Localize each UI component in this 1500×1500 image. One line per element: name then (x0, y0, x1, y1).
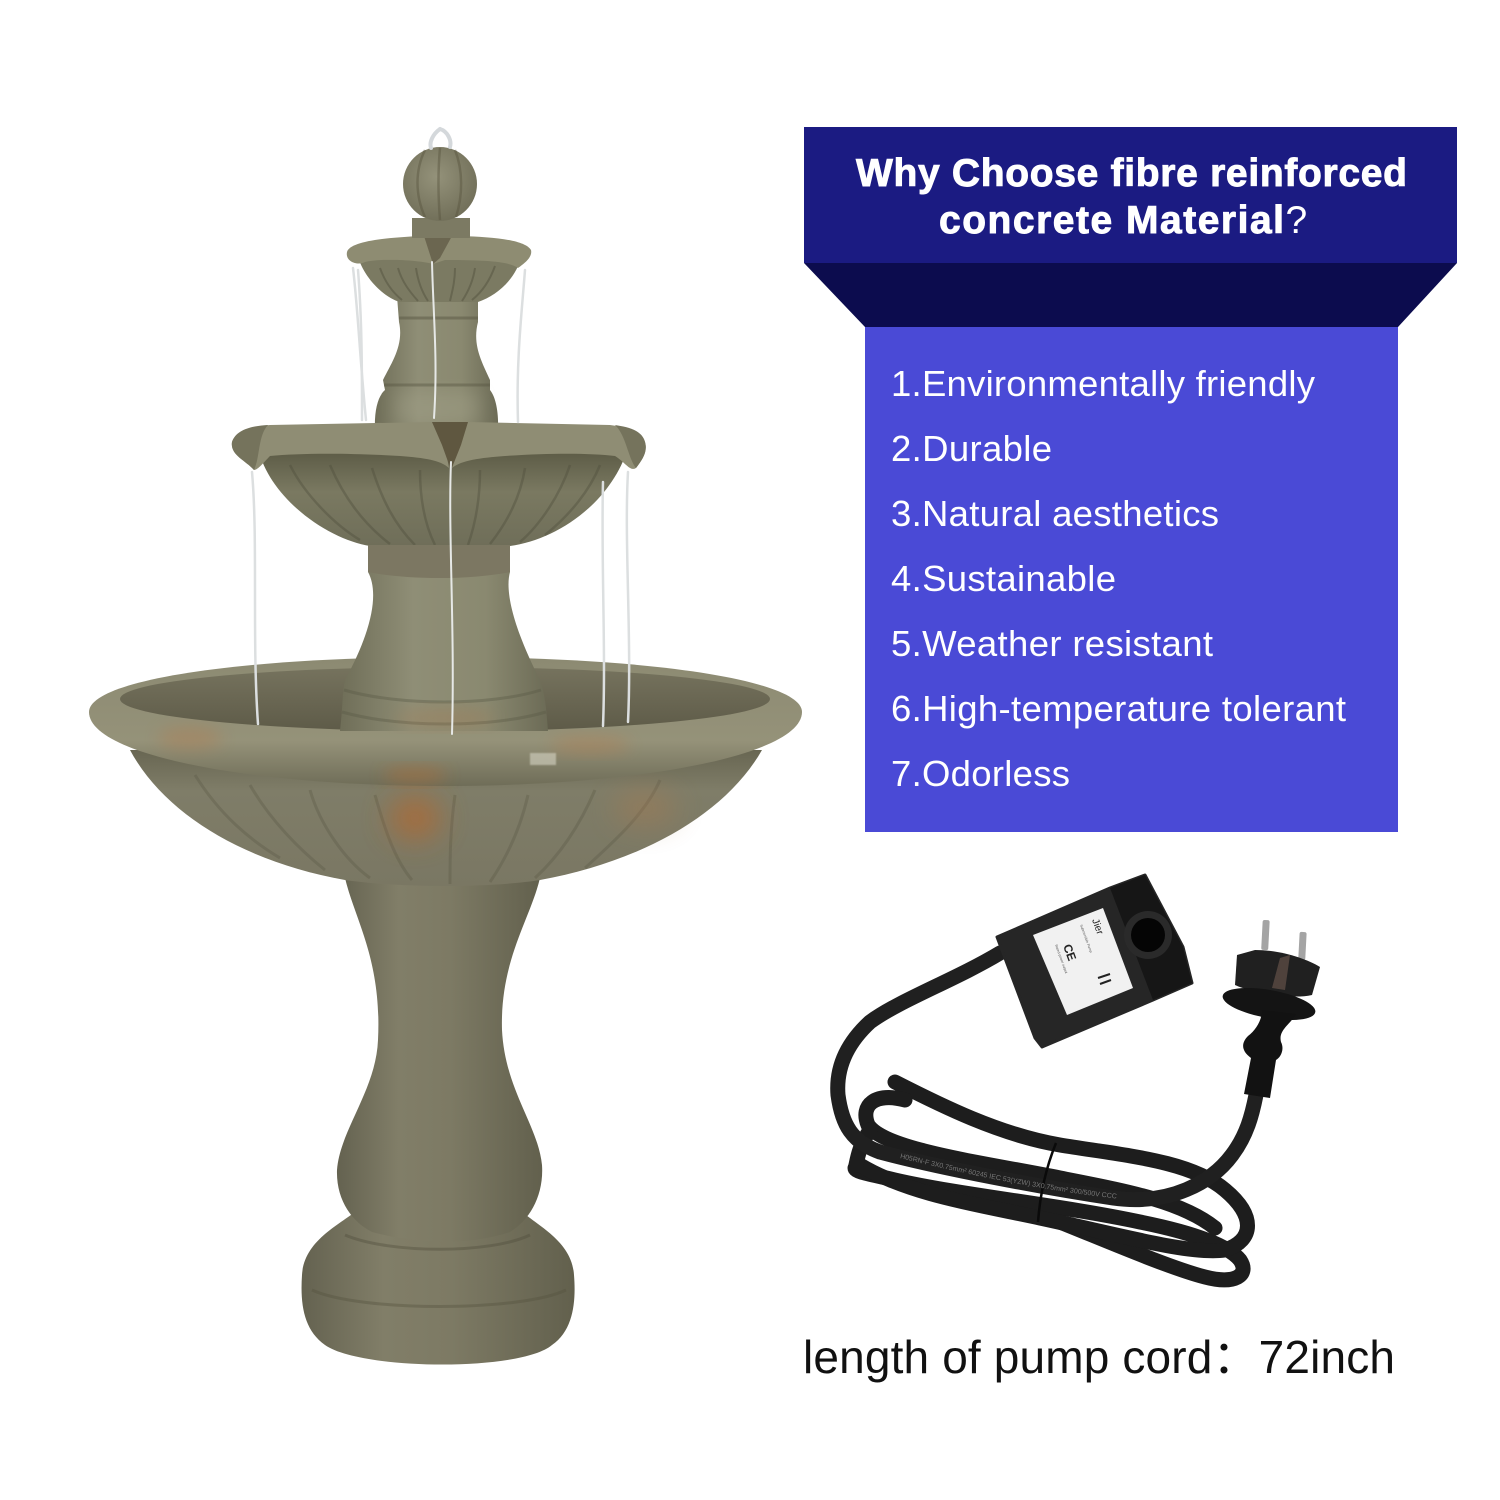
pump label: CE (1060, 942, 1079, 963)
cord marking: H05RN-F 3X0.75mm² 60245 IEC 53(YZW) 3X0.75mm² 300/500V CCC (900, 1154, 1116, 1198)
benefits text: 7.Odorless (891, 753, 1070, 794)
middle rim with spouts (232, 422, 646, 470)
upper rim with spouts (347, 236, 531, 268)
pump label: Jier (1089, 917, 1105, 937)
benefits text (891, 363, 1346, 794)
benefits text: 5.Weather resistant (891, 623, 1213, 664)
heading: concrete Material (939, 199, 1284, 242)
cord coils (838, 953, 1256, 1280)
main cord (838, 953, 1256, 1200)
benefits text: 3.Natural aesthetics (891, 493, 1219, 534)
fountain pedestal (337, 878, 542, 1242)
fountain (89, 129, 802, 1365)
panel: benefits list (865, 327, 1398, 832)
benefits text: 4.Sustainable (891, 558, 1116, 599)
benefits text: 1.Environmentally friendly (891, 363, 1316, 404)
pump label: Submersible Pump (1079, 924, 1093, 953)
lower rim (89, 657, 802, 786)
pump label (1033, 908, 1133, 1015)
cable tie (1038, 1143, 1056, 1222)
heading: ? (1286, 199, 1307, 242)
middle pedestal collar (368, 545, 510, 578)
fountain foot (302, 1208, 575, 1365)
heading: Why Choose fibre reinforced (856, 152, 1407, 195)
panel: why choose header (804, 127, 1457, 327)
pump body (997, 875, 1192, 1047)
lower basin interior (120, 667, 770, 731)
top ball finial (403, 147, 477, 238)
middle pedestal (340, 547, 548, 731)
lower bowl (130, 750, 762, 886)
header bar (804, 127, 1457, 263)
pump label: Rated power output (1054, 944, 1068, 974)
header shadow fold (804, 263, 1457, 327)
upper pedestal (375, 296, 498, 432)
water streams (252, 129, 629, 734)
benefits text: 6.High-temperature tolerant (891, 688, 1346, 729)
upper bowl (356, 250, 523, 302)
middle bowl (258, 448, 628, 578)
benefits text: 2.Durable (891, 428, 1052, 469)
pump with cord (830, 874, 1320, 1288)
cord length caption: length of pump cord：72inch (803, 1331, 1395, 1383)
plug (1220, 920, 1320, 1098)
